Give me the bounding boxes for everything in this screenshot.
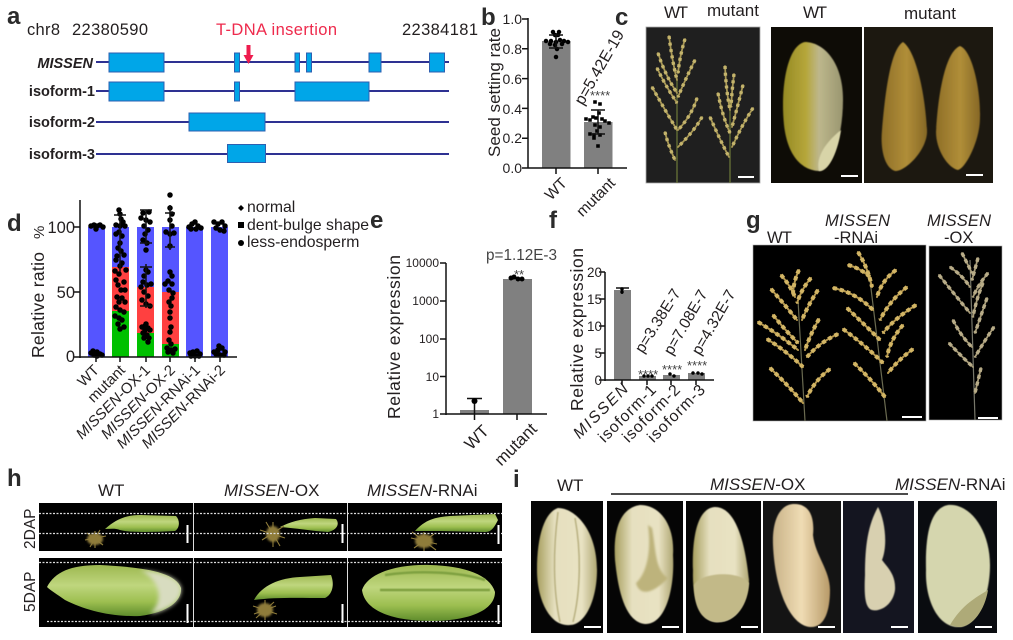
column labels: WT	[664, 3, 688, 22]
p value: p=1.12E-3	[486, 247, 557, 264]
x labels: MISSEN-RNAi-1	[113, 362, 204, 452]
x labels	[461, 419, 541, 470]
photo: OX grain 4	[843, 501, 914, 633]
panel label f: f	[549, 207, 558, 234]
y tick labels: 0	[594, 373, 602, 388]
row labels	[22, 508, 39, 612]
x labels: WT	[74, 362, 103, 390]
photo: OX panicle	[929, 246, 1002, 420]
y axis title: Seed setting rate	[485, 28, 504, 157]
y tick labels: 100	[419, 332, 439, 346]
column labels	[664, 1, 956, 23]
photo: WT grain	[531, 501, 603, 633]
x labels: isoform-2	[619, 382, 684, 446]
photo: OX grain 1	[607, 501, 683, 633]
x labels: WT	[461, 421, 493, 454]
axes	[522, 18, 627, 174]
y tick labels: 1.0	[503, 11, 522, 27]
significance stars: ****	[662, 362, 682, 377]
panel g: panicle photos	[746, 207, 1002, 421]
y tick labels: 0.4	[503, 101, 522, 117]
MISSEN gene model: MISSEN	[37, 56, 94, 72]
panel d: relative ratio stacked bars	[7, 195, 369, 452]
y tick labels: 15	[587, 292, 602, 307]
panel label d: d	[7, 210, 22, 237]
panel label c: c	[615, 4, 628, 31]
MISSEN gene model	[37, 53, 449, 72]
icon: red insertion arrow	[244, 45, 254, 64]
isoform-3 gene model: isoform-3	[29, 147, 95, 163]
column labels: MISSEN-RNAi	[895, 475, 1006, 494]
scatter points	[91, 195, 225, 356]
panel h: developing grain photos	[7, 465, 502, 627]
y tick labels: 10	[426, 370, 439, 384]
y axis title: Relative expression	[384, 255, 404, 419]
panel a: gene structure	[7, 3, 478, 163]
column labels: -RNAi	[834, 229, 878, 247]
y tick labels: 50	[57, 284, 75, 302]
column labels: mutant	[707, 1, 759, 20]
OX group line	[611, 493, 908, 495]
isoform-1 gene model: isoform-1	[29, 84, 95, 100]
T-DNA insertion label: T-DNA insertion	[216, 21, 337, 39]
error bars WT	[549, 34, 563, 48]
column labels: mutant	[904, 4, 956, 23]
column labels: WT	[767, 229, 792, 247]
panel label a: a	[7, 3, 21, 30]
x labels	[542, 174, 619, 220]
isoform-2 gene model: isoform-2	[29, 115, 95, 131]
x labels: MISSEN	[570, 380, 632, 442]
y tick labels: 0.2	[503, 130, 522, 146]
column labels: -OX	[944, 229, 973, 247]
axes	[599, 272, 714, 385]
chromosome start coordinate: 22380590	[72, 21, 148, 39]
chromosome end coordinate: 22384181	[402, 21, 478, 39]
legend: dent-bulge shape	[247, 217, 369, 234]
column labels	[557, 475, 1006, 495]
p value: p=5.42E-19	[572, 27, 628, 108]
percent sign: %	[31, 226, 48, 239]
isoform-2 gene model	[29, 113, 449, 131]
error bars and points	[616, 288, 702, 376]
isoform-1 gene model	[29, 82, 449, 101]
x labels	[73, 361, 229, 452]
chromosome name: chr8	[27, 21, 60, 39]
scatter mutant	[586, 102, 609, 146]
column labels: WT	[557, 476, 583, 495]
x labels: MISSEN-OX-1	[73, 362, 154, 443]
x labels: MISSEN-OX-2	[98, 362, 179, 443]
photo: panicles	[646, 27, 760, 183]
x labels: isoform-3	[644, 382, 709, 446]
x labels: WT	[542, 174, 571, 204]
column labels: MISSEN	[927, 212, 991, 230]
y tick labels: 0.6	[503, 71, 522, 87]
significance stars: ****	[687, 358, 707, 373]
row labels: 5DAP	[22, 572, 39, 612]
photo: mutant grains	[864, 27, 993, 183]
y tick labels: 0	[66, 348, 75, 366]
axes	[74, 200, 237, 362]
legend	[238, 199, 369, 251]
x labels: mutant	[491, 419, 541, 470]
y tick labels	[47, 219, 75, 366]
photo: RNAi grain	[918, 501, 997, 633]
row labels: 2DAP	[22, 508, 39, 549]
photo: OX grain 2	[686, 501, 761, 633]
significance stars: ****	[638, 367, 658, 382]
panel i: mature grain photos	[513, 466, 1006, 633]
y tick labels: 0.0	[503, 160, 522, 176]
y axis title: Relative ratio	[28, 252, 48, 358]
bars	[460, 279, 532, 414]
photo row: 5DAP	[39, 558, 502, 627]
x labels: isoform-1	[595, 382, 660, 446]
x labels	[570, 380, 709, 446]
error bars and points	[467, 277, 522, 420]
y tick labels	[503, 11, 522, 176]
p values: p=4.32E-7	[689, 287, 739, 358]
column labels: MISSEN-OX	[710, 475, 805, 494]
legend: less-endosperm	[247, 234, 359, 251]
stacked bars	[88, 227, 228, 357]
panel e: relative expression log chart	[370, 207, 557, 470]
error bars	[114, 205, 175, 308]
column labels	[767, 212, 991, 247]
error bars mutant	[591, 110, 605, 134]
bars	[614, 290, 705, 380]
bars	[542, 41, 612, 168]
y tick labels: 100	[47, 219, 75, 237]
panel label e: e	[370, 207, 383, 234]
y tick labels: 5	[594, 346, 602, 361]
panel label b: b	[481, 4, 496, 31]
column labels: MISSEN	[825, 212, 890, 230]
p values: p=7.08E-7	[661, 287, 711, 358]
column labels: WT	[803, 3, 827, 22]
x labels: MISSEN-RNAi-2	[138, 362, 229, 452]
p values: p=3.38E-7	[632, 286, 685, 356]
panel label g: g	[746, 207, 761, 234]
photo row: 2DAP	[39, 503, 502, 551]
significance stars	[638, 358, 707, 382]
significance stars: **	[514, 267, 524, 282]
legend: normal	[247, 199, 295, 216]
photo: WT and RNAi panicles	[753, 245, 926, 421]
scatter WT	[546, 32, 568, 57]
column labels: WT	[98, 481, 124, 500]
y tick labels: 1000	[412, 294, 439, 308]
y tick labels: 10000	[406, 256, 439, 270]
x labels: mutant	[84, 361, 129, 406]
y tick labels: 20	[587, 265, 602, 280]
photo: WT grain	[771, 27, 862, 183]
panel f: isoform expression chart	[549, 207, 739, 446]
photo: OX grain 3	[763, 501, 841, 633]
panel label i: i	[513, 466, 520, 493]
y tick labels	[406, 256, 439, 421]
panel c: panicle and grain photos	[615, 1, 993, 183]
p values	[632, 286, 739, 358]
column labels: MISSEN-RNAi	[367, 481, 478, 500]
x labels: mutant	[573, 174, 619, 220]
isoform-3 gene model	[29, 144, 449, 163]
significance stars: ****	[590, 88, 610, 103]
column labels	[98, 481, 478, 500]
column labels: MISSEN-OX	[224, 481, 319, 500]
y axis title: Relative expression	[567, 248, 587, 411]
y tick labels: 0.8	[503, 41, 522, 57]
y tick labels: 1	[432, 407, 439, 421]
panel b: seed setting rate chart	[481, 4, 628, 220]
y tick labels	[587, 265, 602, 388]
y tick labels: 10	[587, 319, 602, 334]
panel label h: h	[7, 465, 22, 492]
axes	[440, 263, 547, 420]
